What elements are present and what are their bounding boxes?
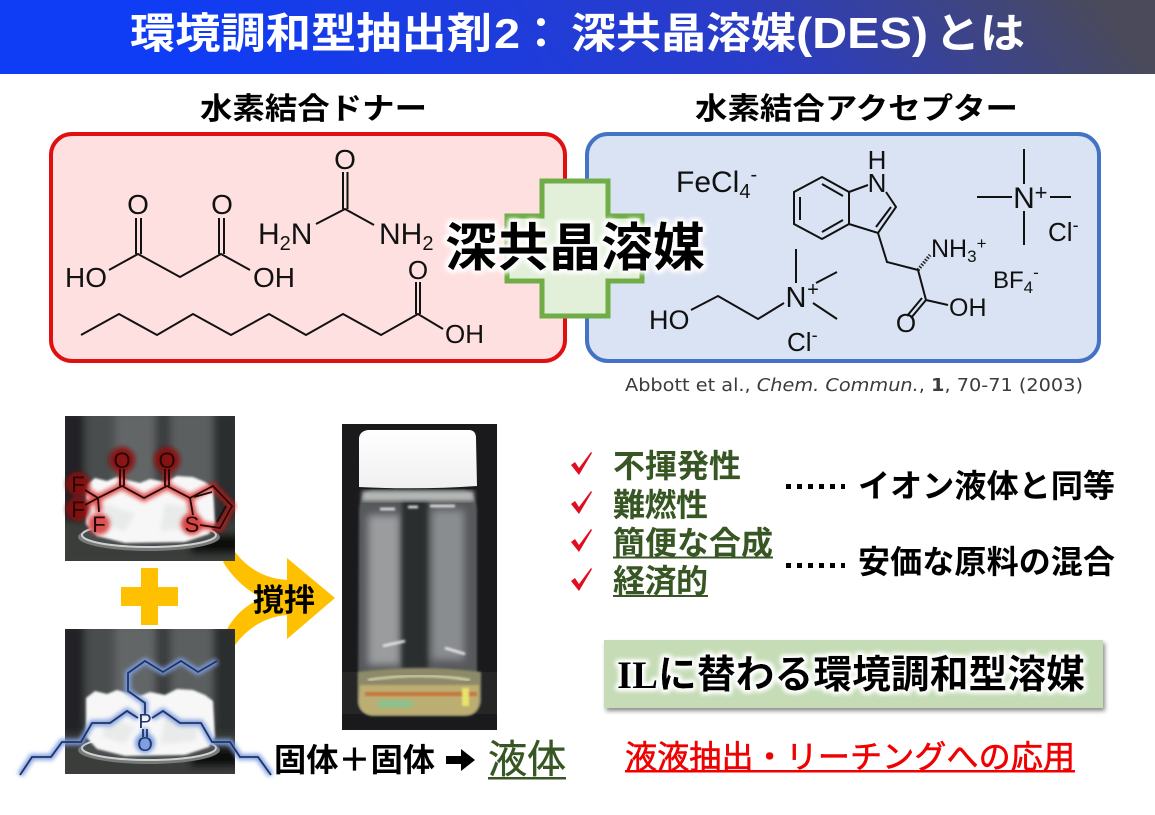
title banner: (DES) xyxy=(796,9,928,58)
panel: hydrogen bond acceptors xyxy=(587,134,1099,361)
heading: hydrogen bond donor: 水素結合ドナー xyxy=(200,93,427,126)
molecule: tryptophan: NH xyxy=(931,235,967,263)
molecule: choline chloride: - xyxy=(812,325,818,345)
callout: environmentally friendly alternative to IL: ILに替わる環境調和型溶媒 xyxy=(617,654,1085,697)
title banner: ： xyxy=(520,10,562,57)
molecule overlay: blue TOPO: O xyxy=(137,734,153,756)
arrow: stirring: 撹拌 xyxy=(253,583,315,618)
arrow: to liquid xyxy=(446,749,475,771)
molecule: tryptophan: H xyxy=(868,145,886,175)
molecule: urea: 2 xyxy=(280,233,291,255)
molecule overlay: red beta-diketone: S xyxy=(185,512,199,537)
applications text: 液液抽出・リーチングへの応用 xyxy=(625,739,1075,775)
molecule: urea: O xyxy=(334,144,356,175)
panel: hydrogen bond donors xyxy=(51,134,565,361)
molecule: tryptophan xyxy=(794,145,987,338)
molecule: choline chloride: HO xyxy=(649,305,690,335)
molecule: tryptophan: OH xyxy=(949,294,986,322)
vial cap xyxy=(359,430,477,488)
molecule: BF4 anion: 4 xyxy=(1024,278,1033,297)
molecule: tetramethylammonium chloride: + xyxy=(1035,180,1047,205)
molecule: urea: N xyxy=(291,218,312,251)
molecule overlay: red beta-diketone: F xyxy=(71,472,85,497)
molecule: decanoic acid: OH xyxy=(445,319,484,349)
property checklist: 簡便な合成 xyxy=(613,525,773,561)
molecule: malonic acid: OH xyxy=(253,262,295,293)
molecule: malonic acid: O xyxy=(127,189,149,220)
property checklist xyxy=(571,448,773,599)
molecule: choline chloride: + xyxy=(807,279,819,301)
green plus with deep eutectic solvent label xyxy=(445,181,705,316)
photo: liquid in vial xyxy=(342,424,497,730)
molecule: FeCl4 anion: 4 xyxy=(739,181,750,203)
property checklist: 経済的 xyxy=(613,563,708,599)
comparison: same as ionic liquids: イオン液体と同等 xyxy=(858,468,1115,504)
icon: yellow plus xyxy=(121,568,178,625)
molecule: FeCl4 anion: FeCl xyxy=(676,166,739,199)
icon: checks xyxy=(571,452,592,591)
molecule: urea xyxy=(258,144,433,255)
callout: environmentally friendly alternative to IL xyxy=(604,640,1103,708)
arrow: stirring xyxy=(223,552,335,645)
molecule: tryptophan: 3 xyxy=(967,247,977,266)
molecule: decanoic acid xyxy=(81,255,484,349)
heading: hydrogen bond acceptor: 水素結合アクセプター xyxy=(695,93,1018,126)
molecule overlay: red beta-diketone: O xyxy=(113,448,131,473)
molecule: tetramethylammonium chloride: - xyxy=(1073,215,1079,235)
title banner: 環境調和型抽出剤 xyxy=(130,10,492,57)
formula text: solid plus solid gives liquid: 液体 xyxy=(488,739,566,782)
molecule: FeCl4 anion: - xyxy=(750,164,757,186)
molecule: urea: 2 xyxy=(422,233,433,255)
title banner: とは xyxy=(935,10,1025,57)
molecule: tetramethylammonium chloride: Cl xyxy=(1048,217,1073,247)
vial glass xyxy=(358,490,477,712)
vial liquid xyxy=(358,668,481,716)
molecule overlay: red beta-diketone: O xyxy=(158,448,176,473)
property checklist: 不揮発性 xyxy=(613,448,741,484)
title banner xyxy=(0,0,1155,74)
molecule: decanoic acid: O xyxy=(408,255,428,285)
molecule: tryptophan: N xyxy=(868,168,886,198)
molecule overlay: red beta-diketone xyxy=(66,447,232,537)
molecule: tryptophan: + xyxy=(977,234,987,253)
molecule: urea: H xyxy=(258,218,280,251)
title banner: 2 xyxy=(494,10,520,57)
molecule: tetramethylammonium chloride xyxy=(977,149,1079,247)
property checklist: 難燃性 xyxy=(613,487,708,523)
molecule: malonic acid: HO xyxy=(65,262,107,293)
molecule: choline chloride: Cl xyxy=(787,327,812,357)
molecule: urea: NH xyxy=(379,218,422,251)
molecule: malonic acid: O xyxy=(211,189,233,220)
photo: solid with HBD molecule xyxy=(60,411,240,566)
formula text: solid plus solid gives liquid: 固体＋固体 xyxy=(274,742,435,778)
title banner: 深共晶溶媒 xyxy=(571,10,796,57)
formula text: solid plus solid gives liquid xyxy=(274,739,566,782)
molecule: tetramethylammonium chloride: N xyxy=(1013,182,1035,215)
molecule: malonic acid xyxy=(65,189,295,293)
citation: Abbott et al., Chem. Commun. , 1, 70-71 (2003) xyxy=(625,375,1083,396)
molecule overlay: red beta-diketone: F xyxy=(92,512,106,537)
molecule: BF4 anion: BF xyxy=(993,267,1024,294)
molecule: BF4 anion: - xyxy=(1033,263,1039,282)
molecule: tryptophan: O xyxy=(896,308,916,338)
molecule overlay: blue TOPO xyxy=(20,661,271,775)
green plus with deep eutectic solvent label: 深共晶溶媒 xyxy=(445,220,705,278)
molecule: choline chloride xyxy=(649,249,837,357)
comparison: mixing cheap raw materials: 安価な原料の混合 xyxy=(858,544,1115,580)
molecule: choline chloride: N xyxy=(786,282,806,314)
photo: solid with HBA molecule xyxy=(20,624,271,779)
molecule overlay: red beta-diketone: F xyxy=(71,497,85,522)
molecule overlay: blue TOPO: P xyxy=(138,711,152,733)
